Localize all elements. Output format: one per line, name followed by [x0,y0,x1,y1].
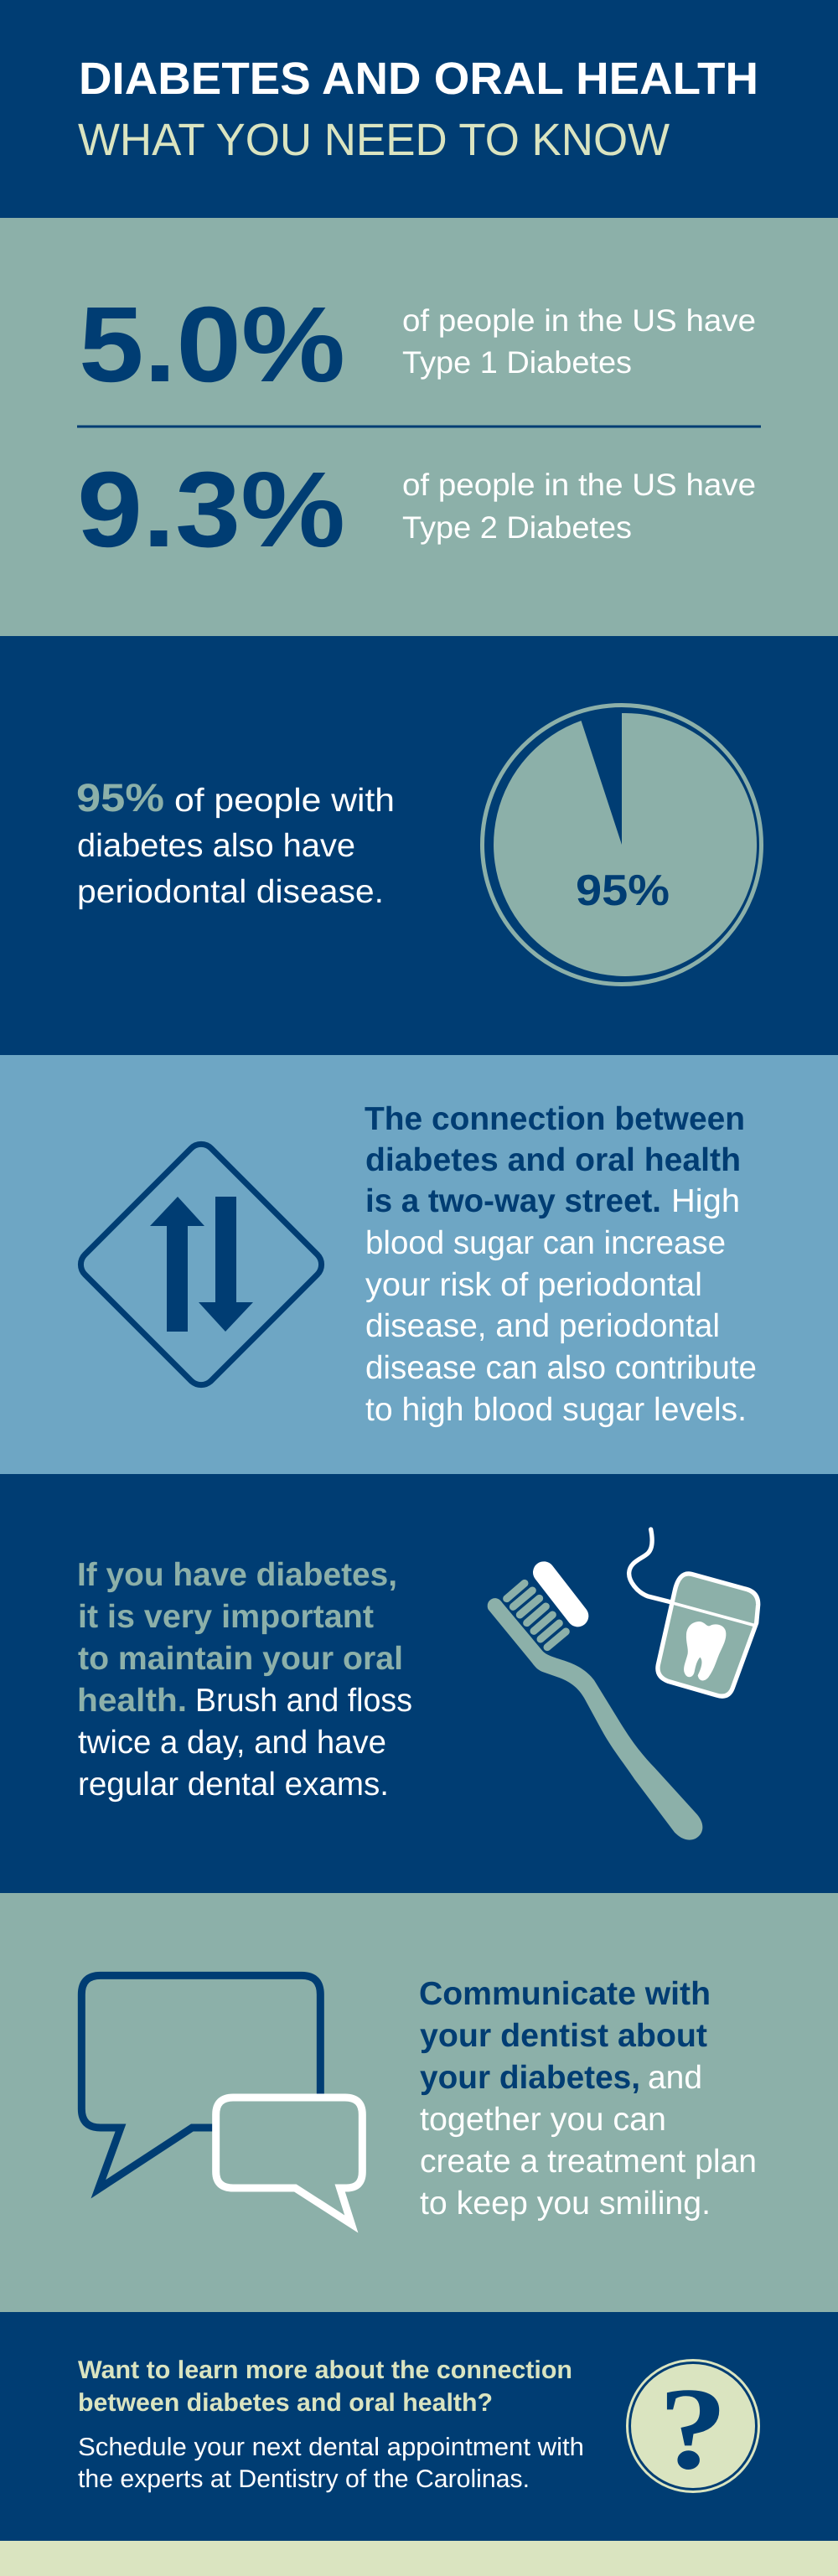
text: communication advice: your diabetes, [420,2060,640,2096]
text: oral health advice: it is very important [78,1599,374,1635]
icon: dental floss [629,1529,758,1696]
stat: type 2 description: Type 2 Diabetes [402,510,632,545]
text: 95 percent statement [76,775,395,910]
text: call to action heading: Want to learn more about the connection [78,2356,572,2384]
text: communication advice: your dentist about [420,2018,707,2054]
text: communication advice: to keep you smiling. [420,2185,711,2222]
stat: type 2 description: of people in the US have [402,468,756,502]
text: communication advice: together you can [420,2102,666,2138]
icon: navy speech bubble [81,1975,320,2189]
text: 95 percent statement: of people with [174,783,395,819]
stat: type 1 description: Type 1 Diabetes [402,345,632,380]
panel: header [0,0,838,218]
text: two-way street explanation: High [671,1183,740,1219]
icon: white speech bubble [216,2098,362,2224]
icon: toothbrush [488,1561,702,1840]
text: two-way street explanation [365,1101,757,1428]
text: two-way street explanation: blood sugar can increase [365,1225,726,1261]
text: call to action heading: between diabetes and oral health? [78,2389,493,2417]
text: communication advice: and [648,2060,702,2096]
stat: type 1 description [402,303,756,380]
text: call to action body: the experts at Dentistry of the Carolinas. [78,2465,530,2493]
panel: prevalence statistics [0,218,838,636]
panel: two-way street [0,1055,838,1474]
title: DIABETES AND ORAL HEALTH [79,54,758,104]
icon: question mark badge: ? [659,2364,727,2494]
panel: communicate with dentist [0,1893,838,2312]
text: two-way street explanation: disease, and periodontal [365,1308,720,1344]
text: call to action body [78,2434,584,2493]
text: communication advice [419,1976,757,2222]
text: oral health advice [77,1557,412,1803]
arrow: up [150,1197,204,1332]
text: two-way street explanation: is a two-way street. [365,1183,661,1219]
text: two-way street explanation: to high blood sugar levels. [365,1392,747,1428]
panel: call to action [0,2312,838,2541]
pie label: 95% [576,866,670,915]
text: 95 percent statement: 95% [76,775,164,820]
text: two-way street explanation: your risk of periodontal [365,1267,702,1303]
icon: two-way traffic sign [75,1138,328,1391]
text: communication advice: Communicate with [419,1976,711,2012]
text: 95 percent statement: diabetes also have [77,828,355,864]
text: communication advice: create a treatment plan [420,2144,757,2180]
icon: tooth [684,1622,726,1680]
pie chart: 95 percent [483,706,761,984]
stat: type 1 percentage: 5.0% [79,285,345,405]
icon: question mark badge [627,2360,759,2494]
stat: type 2 description [402,468,756,545]
text: oral health advice: Brush and floss [195,1683,412,1719]
text: call to action heading [78,2356,572,2417]
text: two-way street explanation: The connection between [365,1101,745,1137]
text: 95 percent statement: periodontal disease. [77,874,384,910]
stat: type 2 percentage: 9.3% [77,450,345,570]
text: oral health advice: to maintain your oral [78,1641,403,1677]
text: oral health advice: regular dental exams. [78,1766,389,1803]
text: two-way street explanation: disease can also contribute [365,1350,757,1386]
panel: maintain oral health [0,1474,838,1893]
arrow: down [199,1197,253,1332]
text: oral health advice: If you have diabetes, [77,1557,397,1593]
stat: type 1 description: of people in the US have [402,303,756,338]
text: call to action body: Schedule your next dental appointment with [78,2434,584,2461]
footer band [0,2541,838,2576]
text: oral health advice: twice a day, and have [78,1725,386,1761]
text: oral health advice: health. [77,1683,187,1719]
panel: periodontal disease [0,636,838,1055]
subtitle: WHAT YOU NEED TO KNOW [78,115,670,165]
text: two-way street explanation: diabetes and oral health [365,1142,741,1178]
